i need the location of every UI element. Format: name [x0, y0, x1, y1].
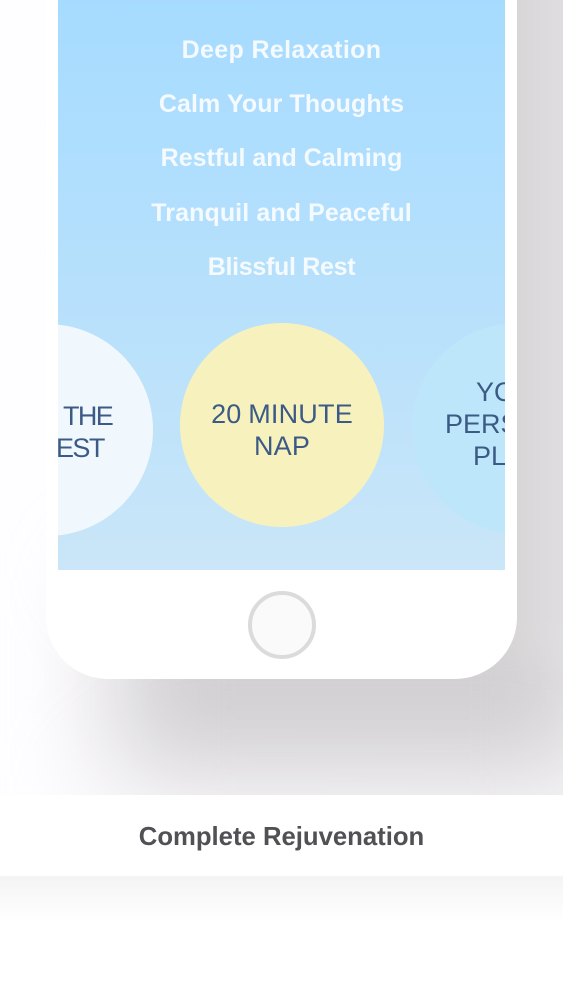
circle label: the rest: THE [63, 401, 112, 431]
text: tranquil and peaceful: Tranquil and Peaceful [151, 199, 412, 227]
circle: the rest [0, 324, 153, 536]
text: restful and calming: Restful and Calming [161, 144, 402, 172]
circle label: 20 minute nap [211, 399, 353, 461]
home button [248, 591, 316, 659]
circle label: your personal plan [445, 377, 505, 471]
phone [46, 0, 517, 679]
circle: 20 minute nap [180, 323, 384, 527]
text: blissful rest: Blissful Rest [208, 253, 355, 281]
text: deep relaxation: Deep Relaxation [182, 36, 381, 64]
circle label: 20 minute nap: 20 MINUTE [211, 399, 353, 429]
phone screen [58, 0, 505, 570]
caption bar [0, 795, 563, 876]
circle: your personal plan [412, 323, 563, 533]
circle label: 20 minute nap: NAP [254, 431, 310, 461]
caption text: Complete Rejuvenation [139, 823, 424, 851]
text: calm your thoughts: Calm Your Thoughts [159, 90, 404, 118]
circle label: the rest [58, 401, 113, 463]
